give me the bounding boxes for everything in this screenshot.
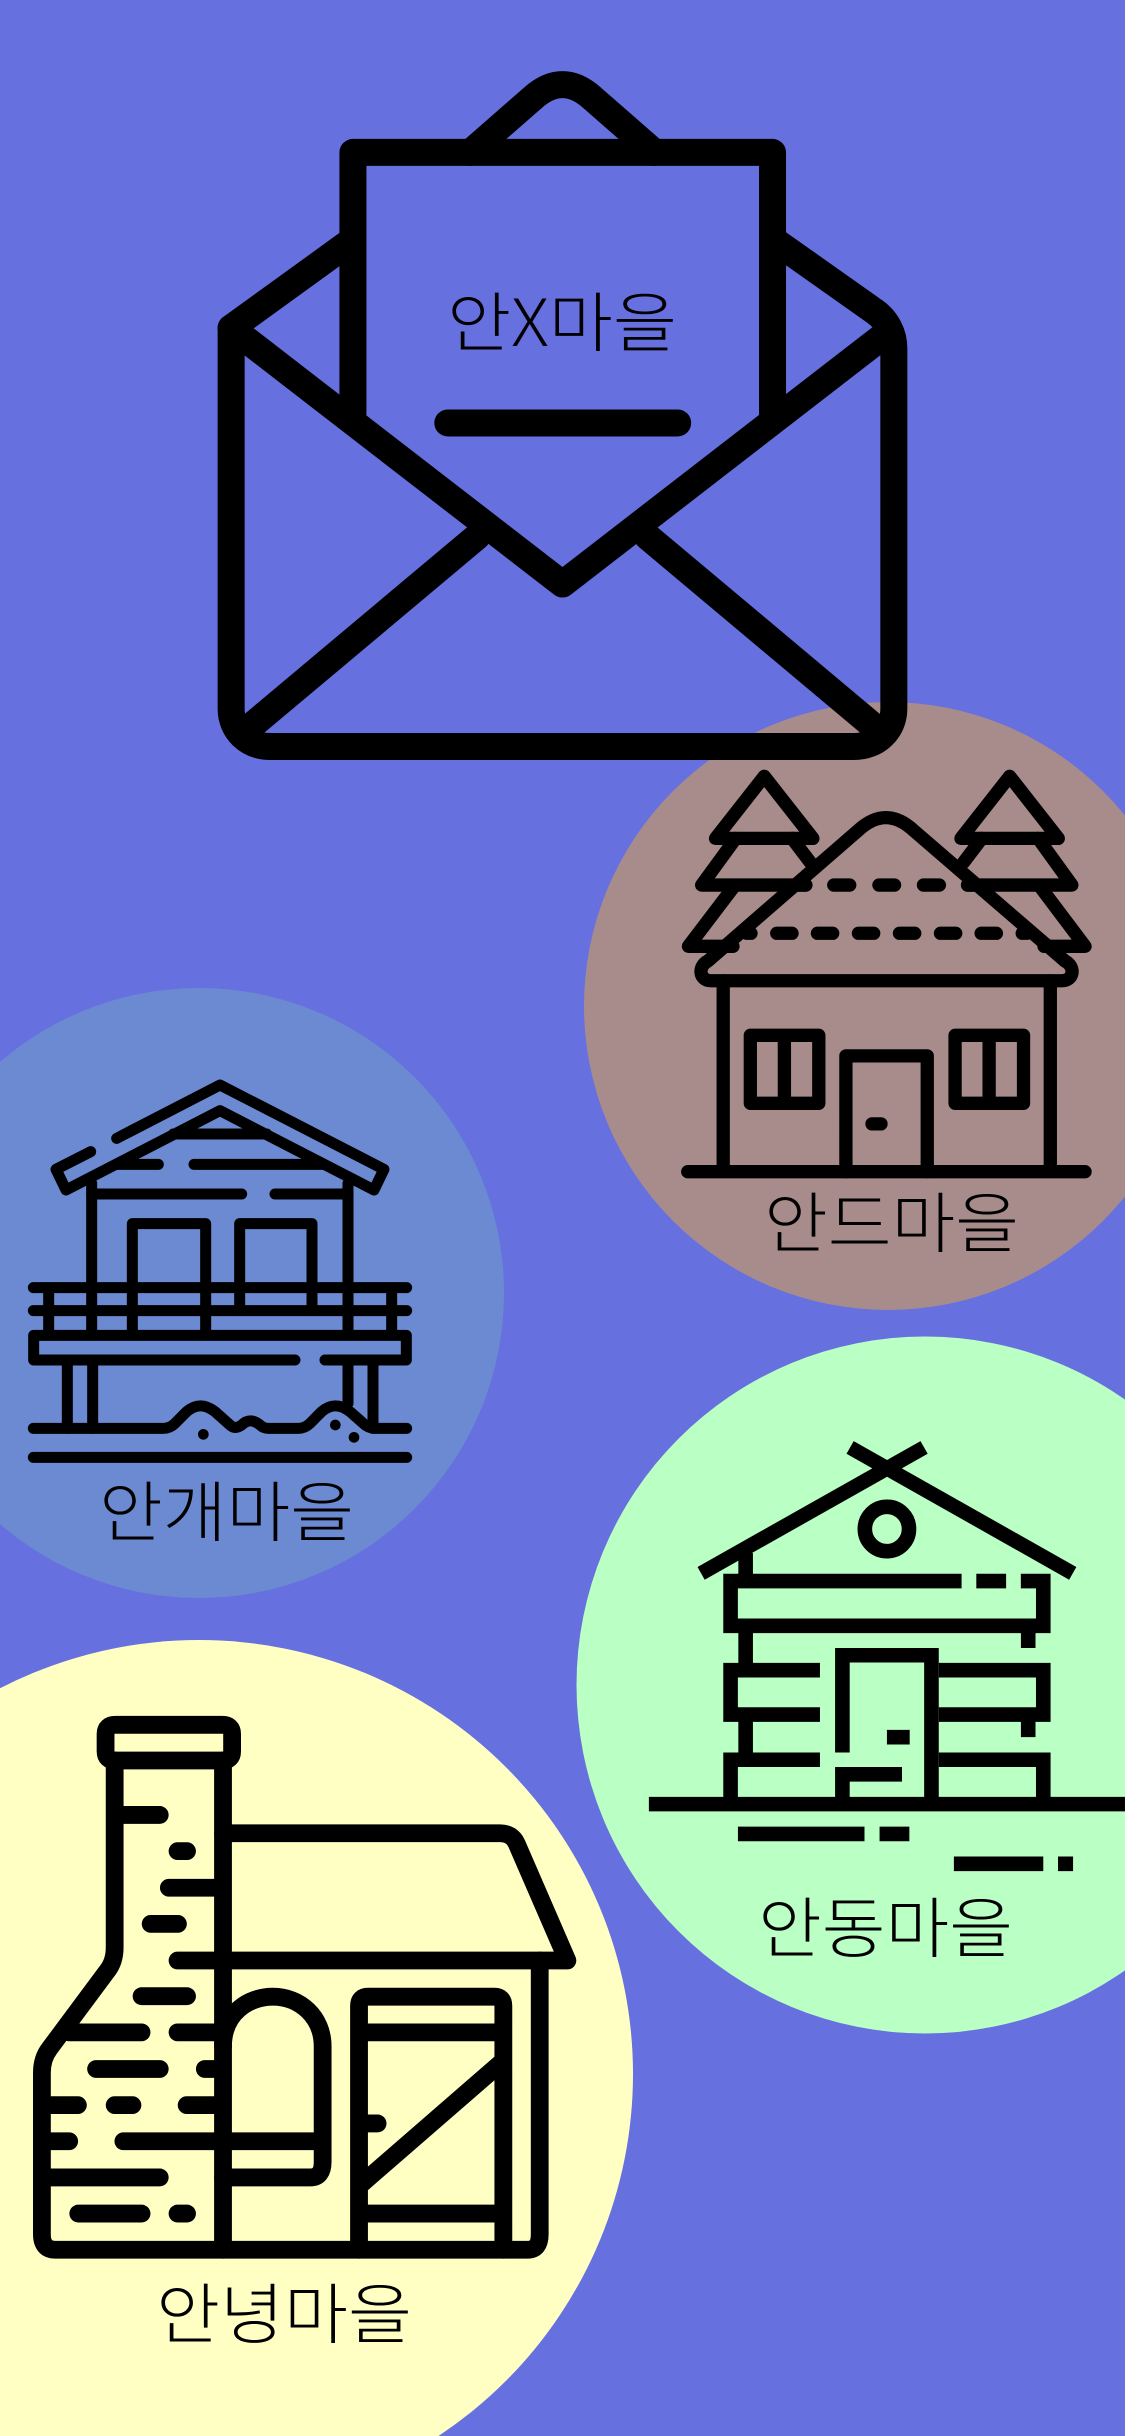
- ground: [33, 1406, 407, 1428]
- icon: open envelope: [231, 85, 894, 747]
- panel: 안동마을 circle: [576, 1336, 1125, 2034]
- chimney cap: [106, 1725, 232, 1760]
- chimney and wall outline: [42, 1760, 540, 2250]
- label: 안개마을: 안개마을: [99, 1476, 354, 1550]
- windows: [132, 1224, 312, 1335]
- label: 안동마을: 안동마을: [758, 1892, 1013, 1966]
- gable lines: [92, 1134, 347, 1194]
- panel: 안드마을 circle: [584, 702, 1125, 1310]
- roof shingles: [747, 885, 1027, 933]
- icon: stilt house: [33, 1085, 407, 1457]
- deck: [34, 1335, 406, 1360]
- ground: [649, 1797, 1125, 1811]
- roof: [223, 1833, 567, 1961]
- icon: log cabin: [649, 1447, 1125, 1864]
- attic window: [865, 1507, 909, 1551]
- roof: [701, 818, 1072, 981]
- roof: [56, 1085, 384, 1190]
- bricks: [45, 1815, 316, 2214]
- arched window: [223, 1997, 323, 2177]
- roof beams: [701, 1447, 1073, 1573]
- label: 안드마을: 안드마을: [764, 1187, 1019, 1261]
- ground dashes: [738, 1834, 1073, 1864]
- railing: [33, 1288, 407, 1335]
- label: 안녕마을: 안녕마을: [156, 2278, 412, 2352]
- log rows: [731, 1553, 1043, 1670]
- door: [842, 1655, 931, 1804]
- title: 안X마을: 안X마을: [447, 271, 677, 365]
- windows: [750, 1035, 1024, 1103]
- door: [359, 1997, 503, 2250]
- pillars: [67, 1360, 373, 1428]
- icon: brick house with chimney: [42, 1725, 567, 2250]
- walls and ground: [688, 981, 1085, 1172]
- door: [846, 1056, 927, 1172]
- icon: cabin with pine trees: [688, 776, 1085, 1172]
- pebbles: [198, 1420, 359, 1443]
- right pine tree: [961, 776, 1085, 946]
- walls: [92, 1183, 348, 1335]
- panel: 안개마을 circle: [0, 988, 504, 1598]
- panel: 안녕마을 circle: [0, 1640, 633, 2436]
- left pine tree: [688, 776, 813, 946]
